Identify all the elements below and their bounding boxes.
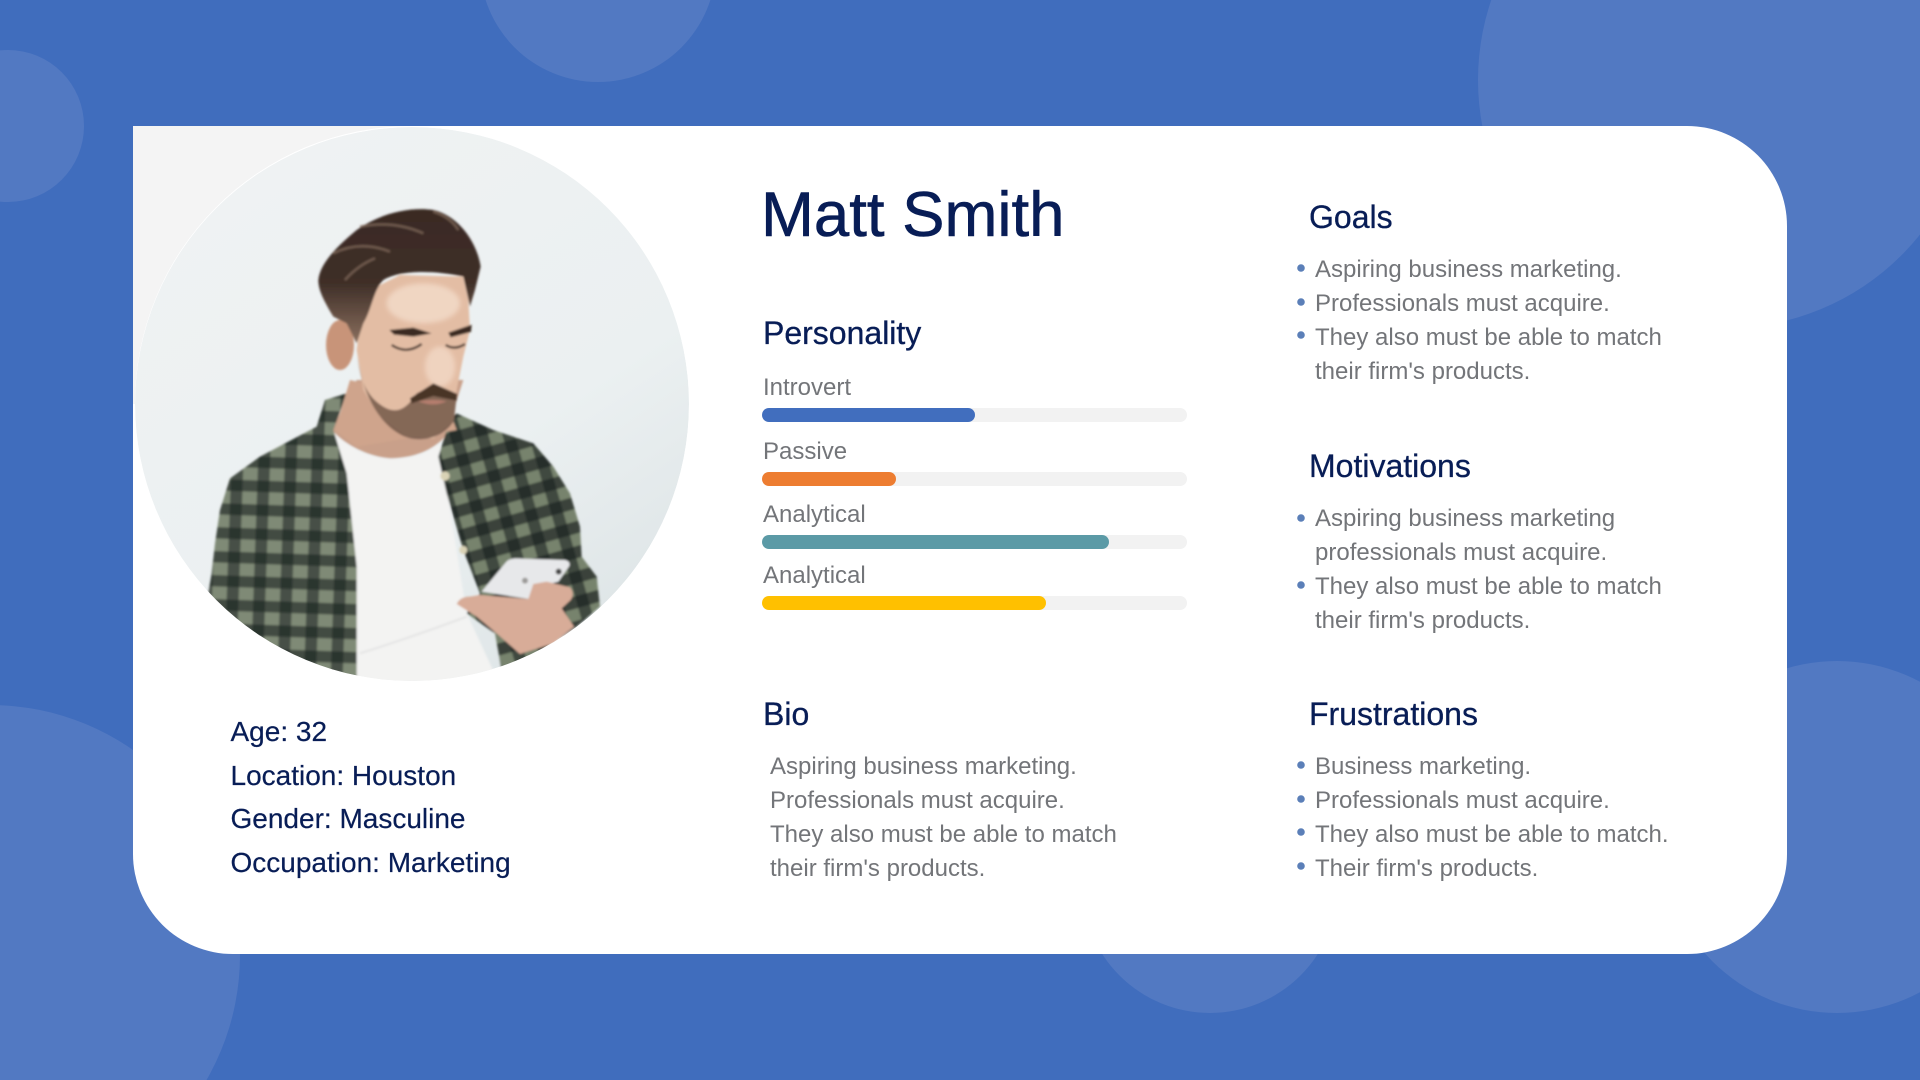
shirt left side: [208, 393, 357, 687]
bar: analytical teal: Analytical: [763, 501, 866, 528]
bio text: their firm's products.: [770, 855, 985, 882]
nose highlight: [425, 347, 455, 387]
heading: bio: Bio: [763, 696, 809, 732]
ear: [326, 320, 354, 370]
goals list: their firm's products.: [1315, 358, 1530, 385]
bar: passive: Passive: [763, 438, 847, 465]
panel: motivations: [1297, 448, 1662, 634]
hair: [318, 209, 481, 343]
shirt fold: [360, 617, 467, 653]
face: [357, 275, 470, 438]
goals list: They also must be able to match: [1315, 324, 1662, 351]
heading: goals: Goals: [1309, 199, 1393, 235]
hair streaks: [333, 212, 458, 280]
bar: analytical teal: [762, 501, 1187, 549]
heading: frustrations: Frustrations: [1309, 696, 1478, 732]
heading: personality: Personality: [763, 315, 921, 351]
motivations list: They also must be able to match: [1315, 573, 1662, 600]
heading: motivations: Motivations: [1309, 448, 1471, 484]
bio text: Aspiring business marketing.: [770, 753, 1077, 780]
bio text: Professionals must acquire.: [770, 787, 1065, 814]
motivations list: their firm's products.: [1315, 607, 1530, 634]
bar: passive: [762, 438, 1187, 486]
moustache and lips: [410, 383, 457, 404]
white card: [133, 126, 1787, 954]
frustrations list: [1297, 753, 1669, 882]
panel: personality: [762, 315, 1187, 610]
profile facts: Occupation: Marketing: [230, 847, 511, 878]
neck and chest: [332, 380, 463, 458]
panel: bio: [763, 696, 1117, 882]
hand: [457, 582, 574, 654]
t-shirt: [334, 433, 492, 681]
panel: goals: [1297, 199, 1662, 385]
panel: frustrations: [1297, 696, 1669, 882]
bar: introvert: Introvert: [763, 374, 851, 401]
photo: man looking at phone: [135, 127, 689, 707]
goals list: Aspiring business marketing.: [1315, 256, 1622, 283]
neck: [340, 379, 458, 434]
frustrations list: Professionals must acquire.: [1315, 787, 1610, 814]
bar: analytical yellow: Analytical: [763, 562, 866, 589]
phone: [482, 558, 570, 599]
shirt buttons: [440, 471, 467, 554]
bio text: They also must be able to match: [770, 821, 1117, 848]
motivations list: Aspiring business marketing: [1315, 505, 1615, 532]
shirt right side: [438, 413, 600, 670]
bio text: [770, 753, 1117, 882]
forehead highlight: [387, 283, 460, 323]
frustrations list: Their firm's products.: [1315, 855, 1538, 882]
eyebrows: [389, 325, 472, 337]
bar: introvert: [762, 374, 1187, 422]
goals list: [1297, 256, 1662, 385]
motivations list: professionals must acquire.: [1315, 539, 1607, 566]
photo corner backdrop: [133, 126, 412, 404]
title: Matt Smith: [761, 180, 1064, 250]
motivations list: [1297, 505, 1662, 634]
goals list: Professionals must acquire.: [1315, 290, 1610, 317]
profile facts: Gender: Masculine: [230, 803, 466, 834]
frustrations list: Business marketing.: [1315, 753, 1531, 780]
bar: analytical yellow: [762, 562, 1187, 610]
profile facts: [230, 716, 511, 878]
profile facts: Location: Houston: [230, 760, 456, 791]
frustrations list: They also must be able to match.: [1315, 821, 1669, 848]
eyes: [392, 344, 465, 350]
profile facts: Age: 32: [230, 716, 327, 747]
beard: [357, 357, 457, 439]
